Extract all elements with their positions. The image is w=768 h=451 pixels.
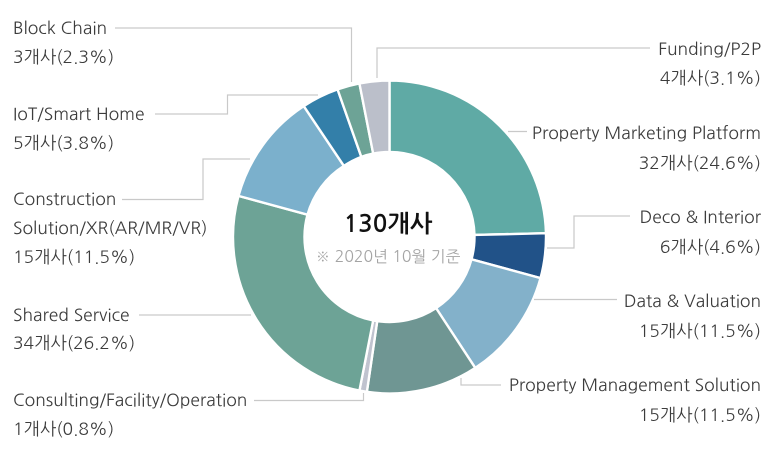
label: IoT/Smart Home xyxy=(13,95,318,152)
label: Block Chain: Block Chain xyxy=(13,19,107,37)
label: Consulting/Facility/Operation: 1개사(0.8%) xyxy=(13,420,114,438)
label: Property Management Solution: 15개사(11.5%) xyxy=(639,406,761,424)
segment: Property Marketing Platform xyxy=(390,80,546,235)
label: Funding/P2P: Funding/P2P xyxy=(658,40,761,58)
label: Property Marketing Platform: 32개사(24.6%) xyxy=(639,154,761,172)
label: Property Management Solution xyxy=(461,376,761,424)
segment: Construction Solution/XR xyxy=(238,106,344,215)
label: Construction Solution/XR: Solution/XR(AR/MR/VR) xyxy=(13,219,207,237)
segment: Data & Valuation xyxy=(436,259,541,368)
label: Block Chain: 3개사(2.3%) xyxy=(13,48,114,66)
label: IoT/Smart Home: IoT/Smart Home xyxy=(13,105,144,123)
label: Consulting/Facility/Operation: Consulting/Facility/Operation xyxy=(13,391,247,409)
label: IoT/Smart Home: 5개사(3.8%) xyxy=(13,134,114,152)
segment: Consulting/Facility/Operation xyxy=(359,320,377,392)
donut chart xyxy=(233,80,546,394)
date note: ※ 2020년 10월 기준 xyxy=(316,248,461,265)
label: Property Marketing Platform xyxy=(508,124,761,172)
label: Deco & Interior: 6개사(4.6%) xyxy=(660,238,761,256)
label: Shared Service: Shared Service xyxy=(13,306,129,324)
label: Block Chain xyxy=(13,19,352,82)
segment: Shared Service xyxy=(233,196,373,391)
label: Consulting/Facility/Operation xyxy=(13,391,364,438)
label: Construction Solution/XR: 15개사(11.5%) xyxy=(13,248,135,266)
total count: 130개사 xyxy=(344,211,433,236)
label: Shared Service: 34개사(26.2%) xyxy=(13,334,135,352)
segment: Block Chain xyxy=(338,83,373,157)
label: Construction Solution/XR: Construction xyxy=(13,190,116,208)
center total xyxy=(316,211,461,265)
label: Deco & Interior: Deco & Interior xyxy=(640,208,762,226)
label: Deco & Interior xyxy=(547,208,762,256)
label: Property Management Solution: Property Management Solution xyxy=(509,376,761,394)
label: Shared Service xyxy=(13,306,251,352)
label: Data & Valuation xyxy=(534,292,761,340)
label: Funding/P2P: 4개사(3.1%) xyxy=(660,69,761,87)
segment: Funding/P2P xyxy=(359,80,390,154)
label: Data & Valuation: 15개사(11.5%) xyxy=(639,322,761,340)
label: Data & Valuation: Data & Valuation xyxy=(624,292,761,310)
segment: IoT/Smart Home xyxy=(304,89,361,166)
segment: Property Management Solution xyxy=(367,308,475,394)
label: Funding/P2P xyxy=(377,40,761,87)
label: Construction Solution/XR xyxy=(13,159,250,266)
label: Property Marketing Platform: Property Marketing Platform xyxy=(532,124,761,142)
segment: Deco & Interior xyxy=(472,233,546,278)
